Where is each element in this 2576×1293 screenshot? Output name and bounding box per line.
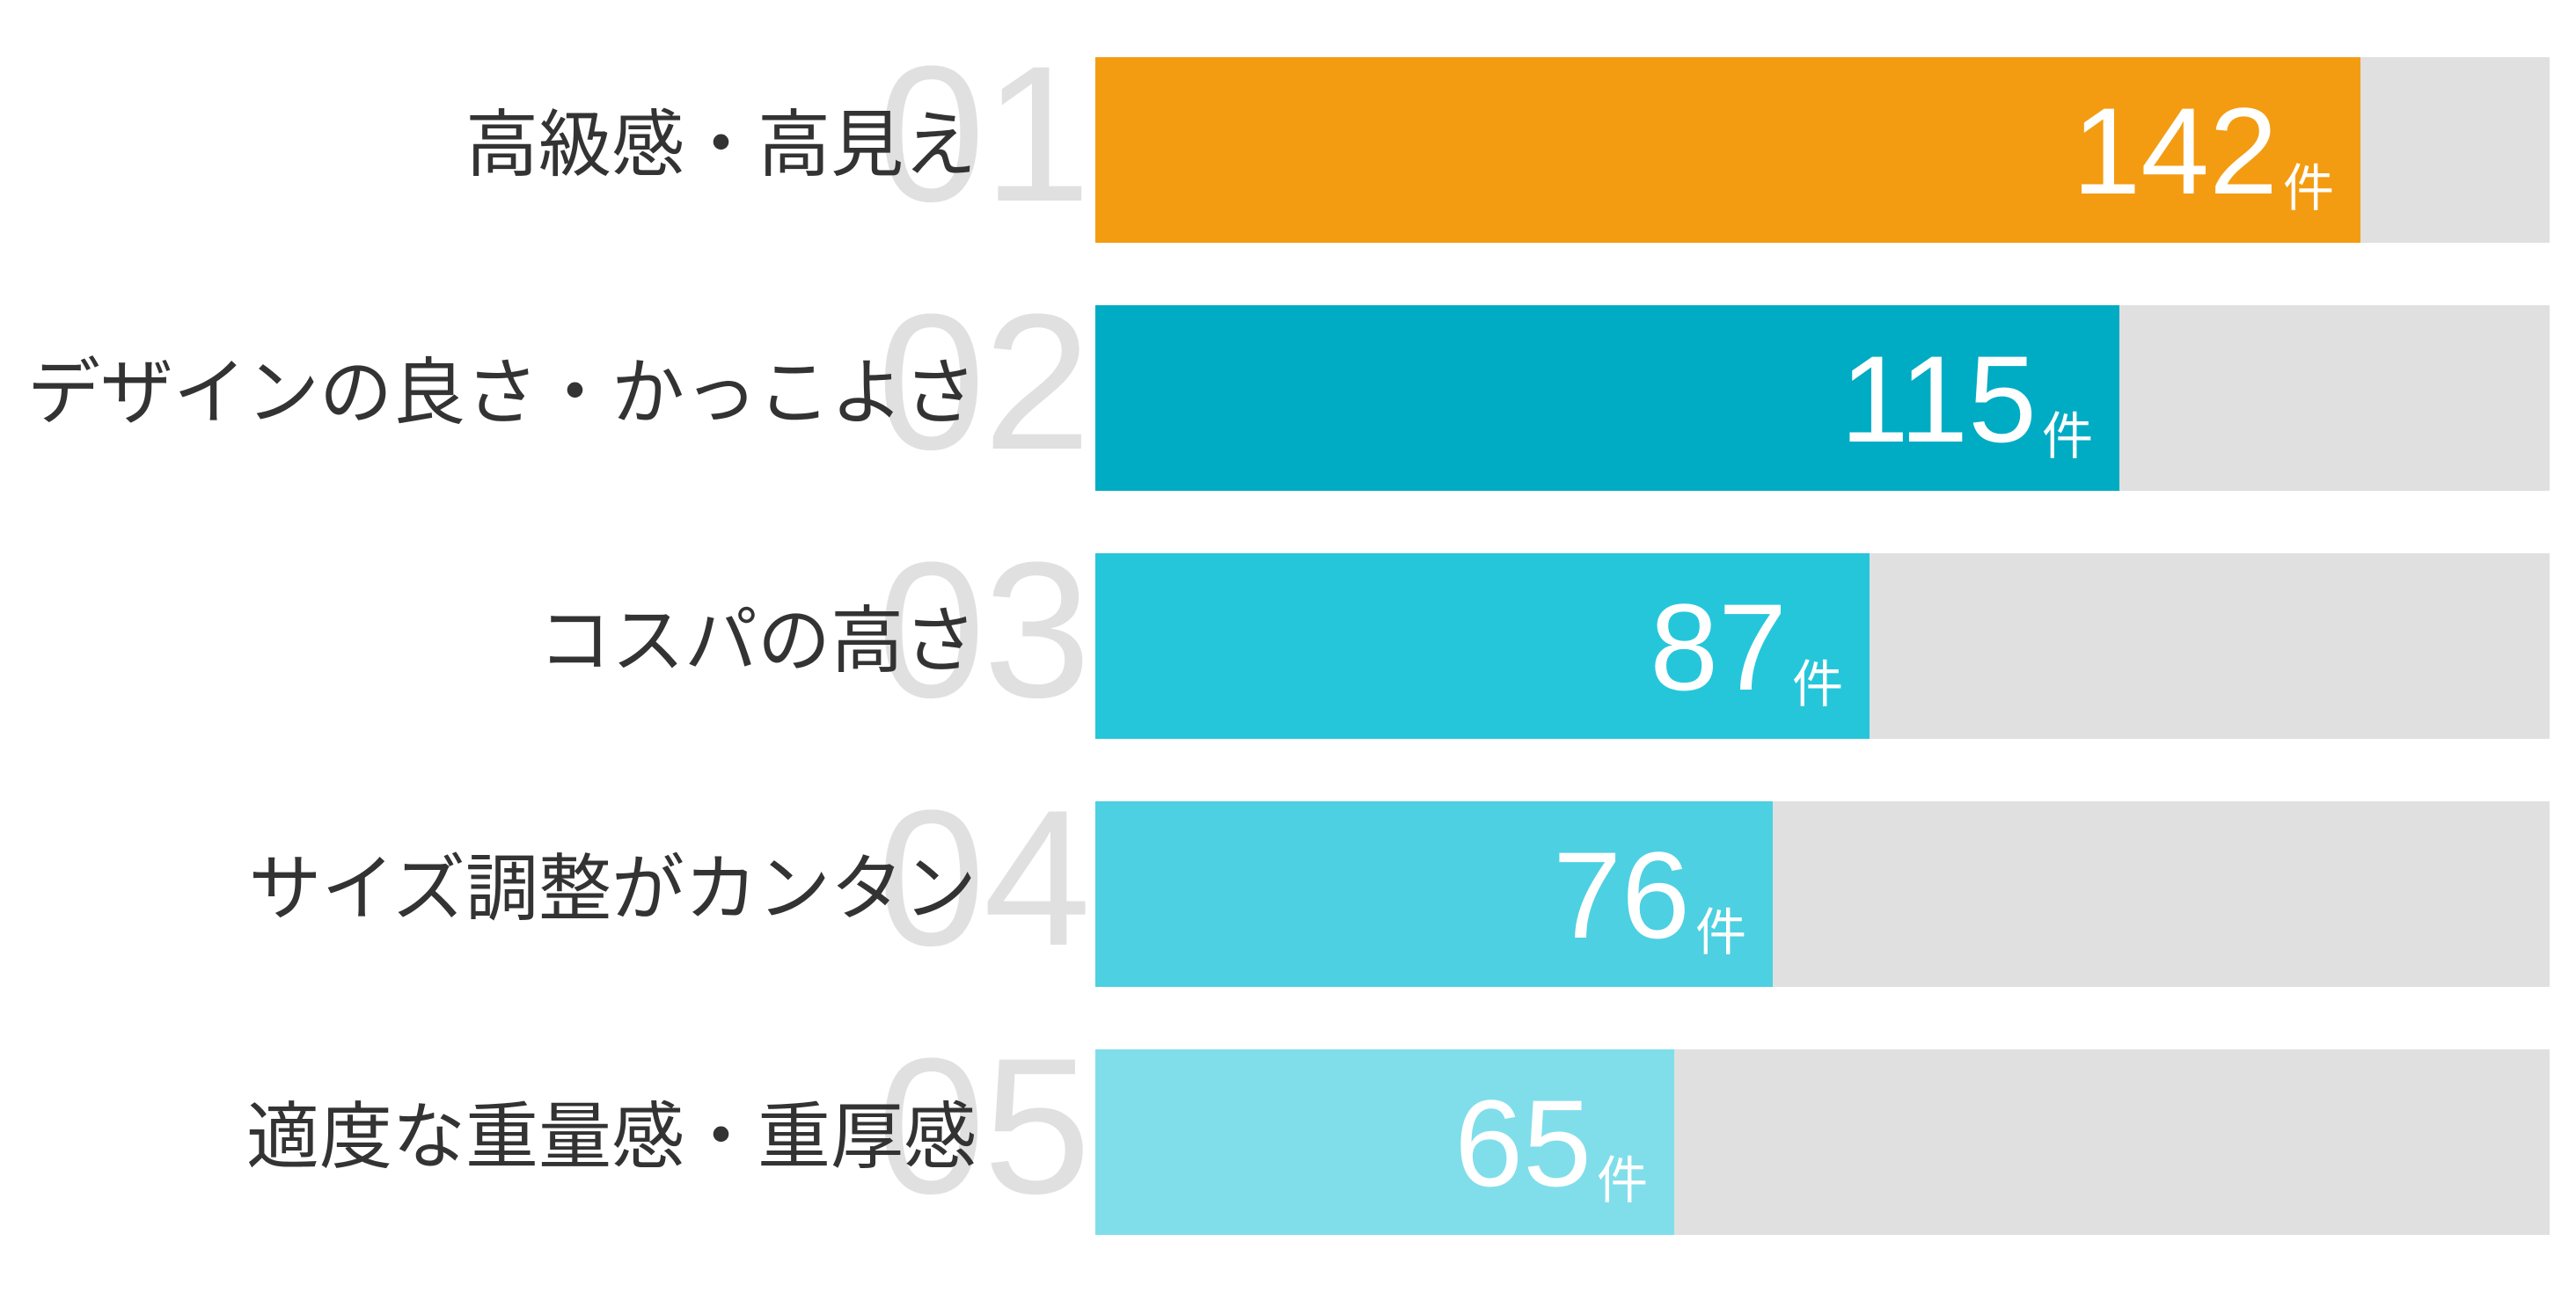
bar 1 [1095,57,2550,243]
rank number 01: 01 [877,26,1089,242]
rank number 05: 05 [877,1018,1089,1234]
bar 3: 87件 [1650,578,1843,716]
label 5: 適度な重量感・重厚感 [246,1096,977,1178]
rank number 04: 04 [877,770,1089,986]
row 1 [465,26,2550,243]
bar 4: 76件 [1553,826,1746,964]
label 1: 高級感・高見え [465,104,977,186]
bar 4 [1095,801,2550,987]
rank number 03: 03 [877,522,1089,738]
bar 2: 115件 [1841,330,2093,468]
row 3 [538,522,2550,739]
label 2: デザインの良さ・かっこよさ [27,352,977,434]
rank number 02: 02 [877,274,1089,490]
row 5 [246,1018,2550,1235]
row 4 [248,770,2550,987]
bar 5: 65件 [1454,1074,1648,1212]
label 4: サイズ調整がカンタン [248,848,977,930]
bar 1: 142件 [2072,82,2334,220]
bar 2 [1095,305,2550,491]
label 3: コスパの高さ [538,600,977,682]
bar 3 [1095,553,2550,739]
bar 5 [1095,1049,2550,1235]
row 2 [27,274,2550,491]
